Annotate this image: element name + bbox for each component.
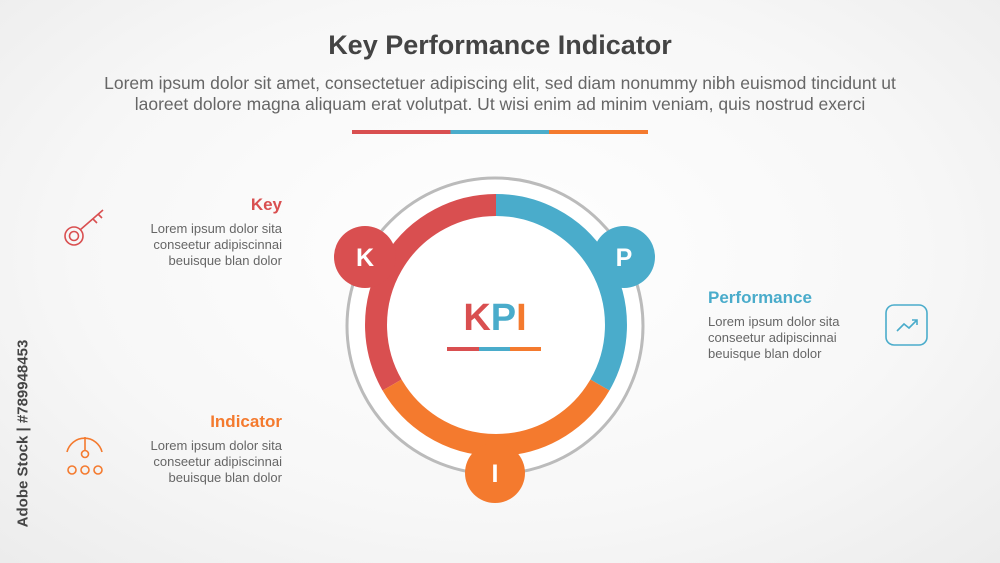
badge I: I	[492, 460, 498, 488]
subtitle text	[104, 73, 896, 114]
panel: key: Key	[251, 195, 282, 214]
KPI underline	[447, 347, 541, 351]
KPI center text: KPI	[463, 297, 527, 339]
panel: indicator: Indicator	[210, 412, 282, 431]
title: Key Performance Indicator	[328, 30, 672, 60]
panel: key	[150, 195, 282, 268]
segment blue	[496, 205, 616, 385]
panel: performance: Performance	[708, 288, 812, 307]
side stock text: Adobe Stock | #789948453	[14, 340, 32, 527]
badge K: K	[356, 244, 374, 272]
badge P	[593, 226, 655, 288]
panel: performance	[708, 288, 840, 361]
panel: indicator	[150, 412, 282, 485]
icon: trend	[886, 305, 927, 345]
subtitle text: laoreet dolore magna aliquam erat volutpat. Ut wisi enim ad minim veniam, quis nostrud exerci	[135, 94, 865, 114]
badge K	[334, 226, 396, 288]
badge I	[465, 443, 525, 503]
segment red	[376, 205, 496, 385]
panel: key: Lorem ipsum dolor sita conseetur adipiscinnai beuisque blan dolor	[150, 221, 282, 268]
segment orange	[392, 385, 600, 445]
badge P: P	[616, 244, 632, 272]
subtitle text: Lorem ipsum dolor sit amet, consectetuer adipiscing elit, sed diam nonummy nibh euismod tincidunt ut	[104, 73, 896, 93]
panel: indicator: Lorem ipsum dolor sita conseetur adipiscinnai beuisque blan dolor	[150, 438, 282, 485]
title underline	[352, 130, 648, 134]
icon: key	[65, 210, 103, 245]
icon: gauge	[67, 437, 102, 474]
panel: performance: Lorem ipsum dolor sita conseetur adipiscinnai beuisque blan dolor	[708, 314, 840, 361]
